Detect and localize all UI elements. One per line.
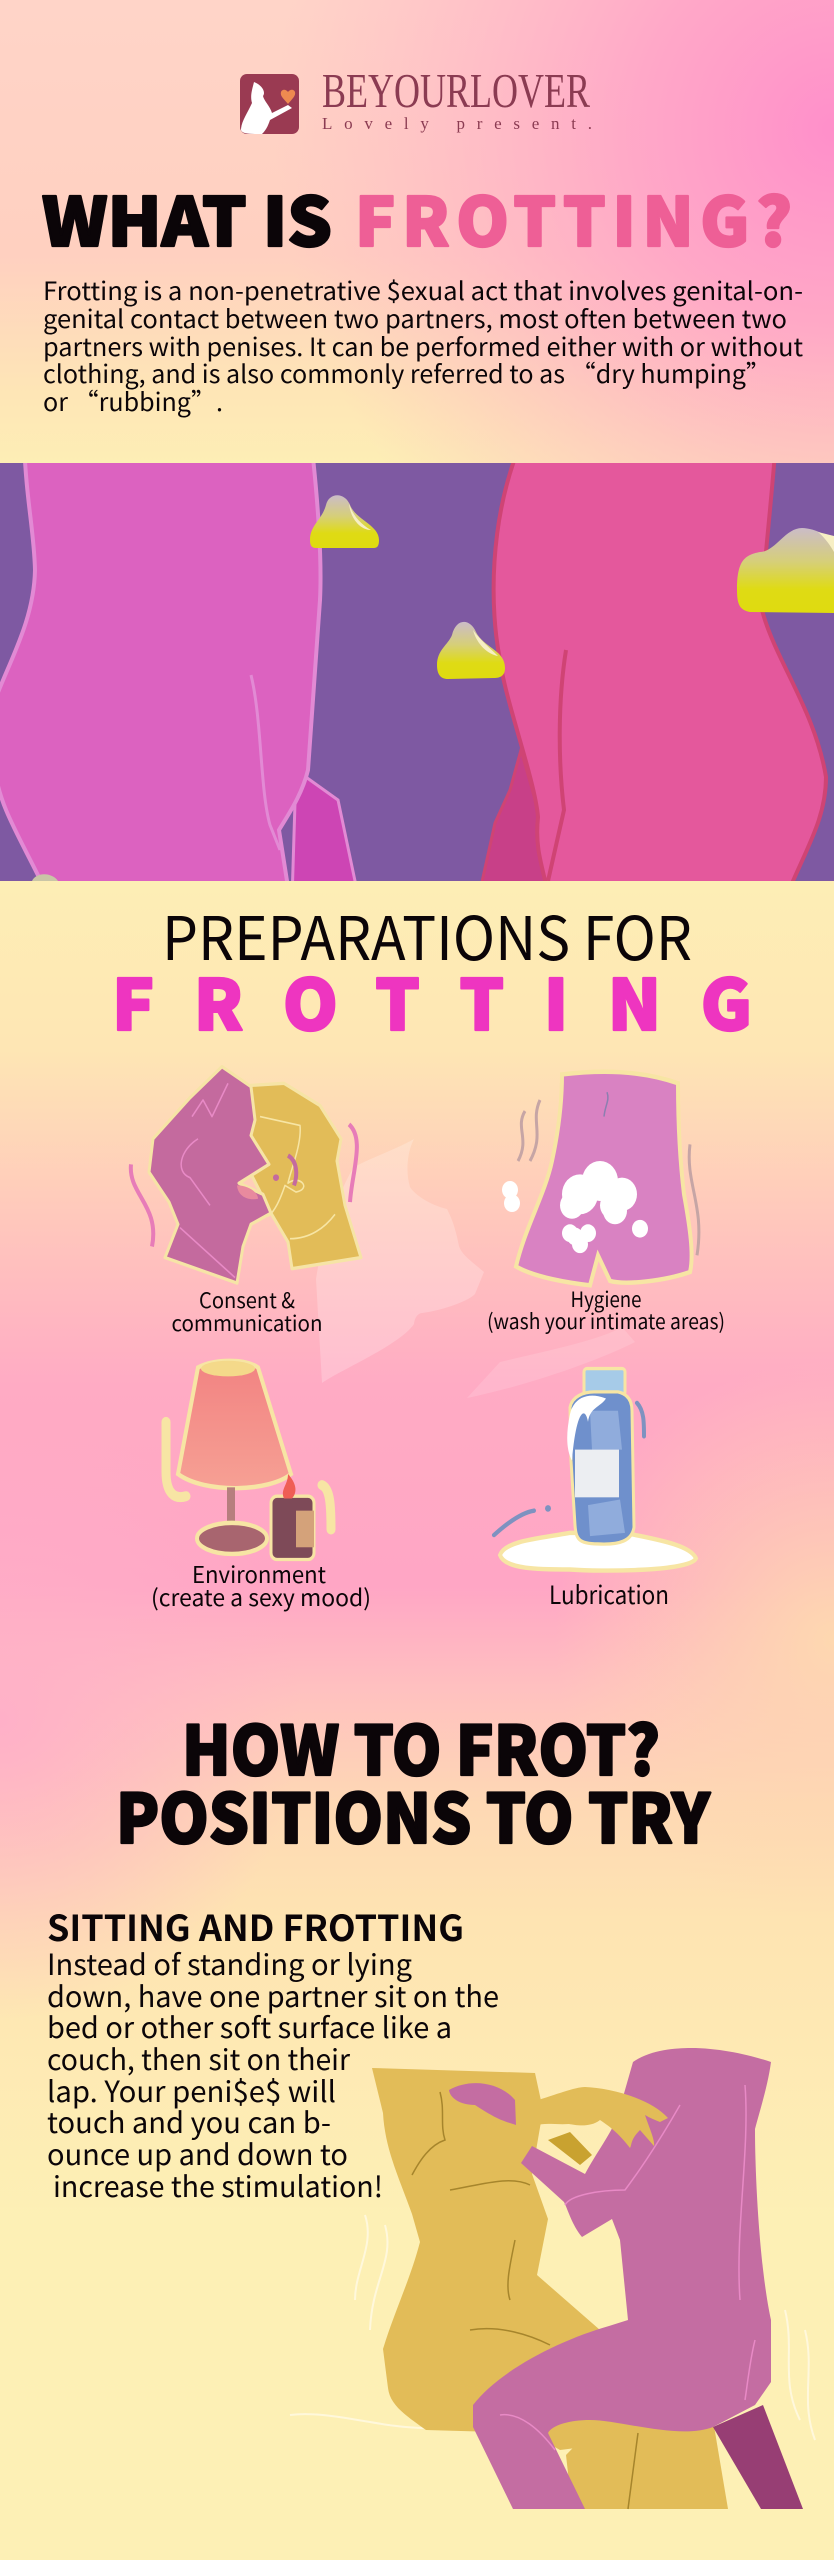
position description text: Instead of standing or lying (47, 1942, 412, 1984)
intro text block: clothing, and is also commonly referred to as “dry humping” (43, 355, 771, 391)
motion lines (290, 2215, 815, 2440)
heading: How to frot, positions to try (116, 1696, 712, 1863)
item: consent and communication (131, 1067, 361, 1338)
detail: yellow partner shoulder patch (548, 2132, 592, 2165)
label: lubrication: Lubrication (549, 1576, 669, 1612)
heading: How to frot, positions to try: HOW TO FROT? (182, 1696, 660, 1795)
position description text: bed or other soft surface like a (47, 2005, 452, 2047)
heading: Preparations for Frotting: FROTTING (112, 950, 752, 1051)
icon: lamp and candle (166, 1361, 331, 1559)
logo: BeYourLover (240, 63, 592, 134)
figure: left partner back leg (291, 776, 356, 881)
illustration: seated embrace (290, 2048, 815, 2509)
icon: gumdrop 3 (737, 528, 834, 613)
heading: Preparations for Frotting (112, 891, 752, 1051)
position description text: ounce up and down to (47, 2132, 348, 2174)
heading: Preparations for Frotting: PREPARATIONS FOR (162, 891, 692, 978)
position description text (47, 1942, 499, 2206)
detail: purple partner body lines (500, 2085, 755, 2450)
label: consent: Consent & (199, 1285, 295, 1315)
position description text: touch and you can b- (47, 2100, 331, 2142)
heading: How to frot, positions to try: POSITIONS TO TRY (116, 1764, 712, 1863)
label: wash your intimate areas: (wash your intimate areas) (487, 1306, 725, 1336)
icon: lubricant bottle (494, 1369, 696, 1571)
figure: purple partner (473, 2048, 771, 2509)
position description text: lap. Your peni$e$ will (47, 2069, 336, 2111)
label: communication: communication (172, 1308, 322, 1338)
figure: left partner inner line (251, 675, 280, 850)
figure: yellow partner legs (566, 2420, 728, 2509)
figure: left partner body (0, 440, 321, 900)
figure: yellow partner torso (372, 2068, 640, 2450)
title: What is Frotting? (42, 169, 792, 266)
icon: gumdrop 2 (437, 622, 505, 679)
item: hygiene (487, 1072, 725, 1336)
figure: purple partner rear leg (713, 2405, 803, 2509)
watermark: faded cat silhouette (316, 1139, 635, 1398)
intro text block: partners with penises. It can be performed either with or without (43, 328, 804, 364)
label: create a sexy mood: (create a sexy mood) (151, 1579, 371, 1613)
detail: yellow partner body lines (412, 2092, 638, 2509)
position description text: couch, then sit on their (47, 2037, 351, 2079)
title: What is Frotting?: WHAT IS (42, 169, 332, 266)
figure: yellow partner arm (535, 2087, 668, 2148)
figure: right partner body (494, 440, 826, 900)
position description text: down, have one partner sit on the (47, 1974, 499, 2016)
icon: two faces (131, 1067, 361, 1283)
icon: cat logo badge (240, 74, 299, 134)
icon: gumdrop 4 partial (32, 874, 58, 881)
panel: illustrated banner with two figures and gumdrops (0, 440, 834, 900)
intro text block: or “rubbing”. (43, 383, 223, 419)
figure: right partner inner line (548, 650, 566, 881)
item: environment (151, 1361, 371, 1613)
figure: purple partner hand (449, 2083, 516, 2125)
title: What is Frotting?: FROTTING? (355, 169, 792, 266)
position description text: increase the stimulation! (53, 2164, 383, 2206)
intro text block (43, 272, 804, 419)
figure: right partner back leg (480, 748, 544, 881)
subheading: Sitting and frotting: SITTING AND FROTTING (47, 1900, 464, 1952)
item: lubrication (494, 1369, 696, 1612)
logo tagline: Lovely present. (322, 114, 592, 133)
label: environment: Environment (192, 1556, 326, 1590)
icon: lower torso with foam (502, 1072, 699, 1285)
logo wordmark: BEYOURLOVER (322, 63, 590, 118)
intro text block: Frotting is a non-penetrative $exual act that involves genital-on- (43, 272, 803, 308)
label: hygiene: Hygiene (570, 1284, 642, 1314)
icon: gumdrop 1 (310, 495, 379, 548)
intro text block: genital contact between two partners, most often between two (43, 300, 787, 336)
